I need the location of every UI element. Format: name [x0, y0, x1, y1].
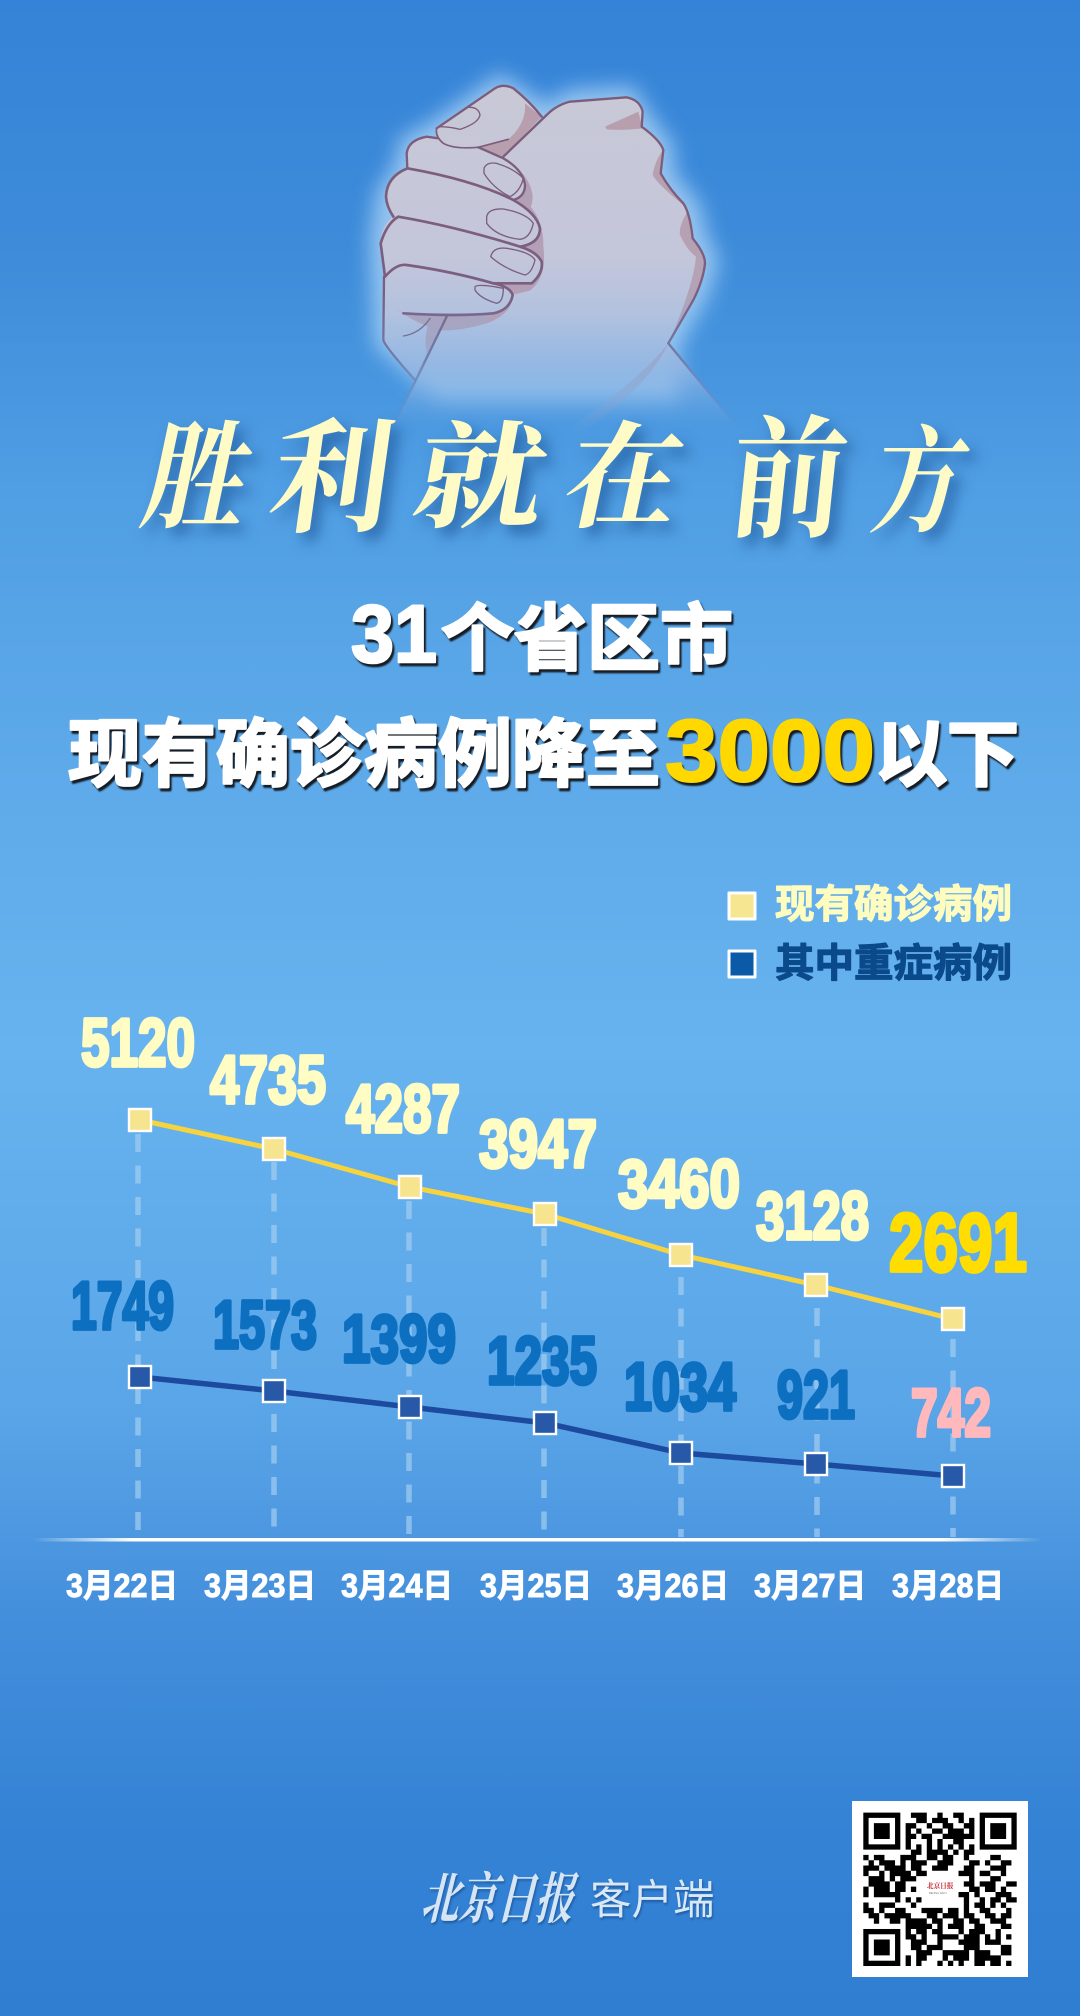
- hand illustration: [375, 80, 743, 440]
- calligraphic title: 在: [552, 386, 701, 552]
- severe values: 921: [777, 1357, 855, 1433]
- calligraphic title: [131, 374, 983, 564]
- brand logo: [416, 1854, 715, 1934]
- legend: [729, 883, 1012, 986]
- subtitle line 1: 31: [351, 589, 437, 680]
- date axis labels: 3月27日: [754, 1567, 866, 1604]
- yellow line: current confirmed: [140, 1120, 953, 1319]
- QR centre logo: 北京日报: [927, 1880, 954, 1890]
- calligraphic title: 前: [722, 374, 858, 564]
- brand calligraphy: 北京日报: [416, 1854, 588, 1934]
- current confirmed values: 4735: [210, 1042, 326, 1118]
- finder centres: [874, 1823, 1006, 1955]
- data modules: [863, 1815, 1017, 1963]
- QR centre logo: BEIJING DAILY: [929, 1891, 947, 1895]
- current confirmed values: 5120: [81, 1005, 195, 1081]
- calligraphic title: 胜: [131, 385, 270, 551]
- QR centre logo: [927, 1880, 954, 1895]
- legend: severe: 其中重症病例: [775, 942, 1012, 986]
- date axis labels: 3月28日: [892, 1567, 1004, 1604]
- brand client text: 客户端: [590, 1866, 715, 1926]
- date axis labels: 3月24日: [341, 1567, 453, 1604]
- right hand and forearm: [392, 97, 743, 440]
- subtitle line 2: 以下: [875, 716, 1019, 796]
- dashed drop lines: [138, 1134, 953, 1537]
- date axis labels: 3月23日: [204, 1567, 316, 1604]
- hand glow: [375, 80, 713, 393]
- severe values: 1399: [342, 1301, 456, 1377]
- date axis labels: [66, 1567, 1004, 1604]
- yellow markers: [129, 1109, 964, 1330]
- date axis labels: 3月25日: [480, 1567, 592, 1604]
- left hand and forearm: [381, 86, 542, 380]
- blue markers: [129, 1366, 964, 1487]
- current confirmed values: 4287: [346, 1071, 460, 1147]
- date axis labels: 3月22日: [66, 1567, 178, 1604]
- severe values: [71, 1268, 991, 1451]
- calligraphic title: 方: [862, 390, 983, 556]
- QR code: [852, 1801, 1028, 1977]
- severe values: 1235: [487, 1323, 597, 1399]
- calligraphic title: 利: [261, 381, 406, 558]
- axis line: [32, 1538, 1042, 1542]
- severe values: 1749: [71, 1268, 174, 1344]
- legend: current confirmed: 现有确诊病例: [775, 883, 1012, 927]
- subtitle line 2: 现有确诊病例降至: [68, 713, 660, 796]
- finger cast shadow: [407, 157, 544, 330]
- blue line: severe: [140, 1377, 953, 1476]
- date axis labels: 3月26日: [617, 1567, 729, 1604]
- current confirmed values: 3947: [479, 1106, 597, 1182]
- severe values: 742: [911, 1375, 991, 1451]
- subtitle: [68, 589, 1019, 800]
- current confirmed values: [81, 1005, 1027, 1289]
- line chart: [32, 1005, 1042, 1604]
- hand outlines: [381, 86, 743, 435]
- current confirmed values: 3460: [618, 1146, 740, 1222]
- severe values: 1573: [213, 1287, 317, 1363]
- highlighted figure: 3000: [665, 701, 875, 800]
- severe values: 1034: [624, 1349, 736, 1425]
- current confirmed values: 3128: [756, 1178, 869, 1254]
- calligraphic title: 就: [403, 386, 562, 552]
- subtitle line 1: 个省区市: [441, 599, 733, 680]
- hand shading: [395, 103, 705, 440]
- current confirmed values: 2691: [889, 1196, 1027, 1289]
- finder patterns: [866, 1815, 1014, 1963]
